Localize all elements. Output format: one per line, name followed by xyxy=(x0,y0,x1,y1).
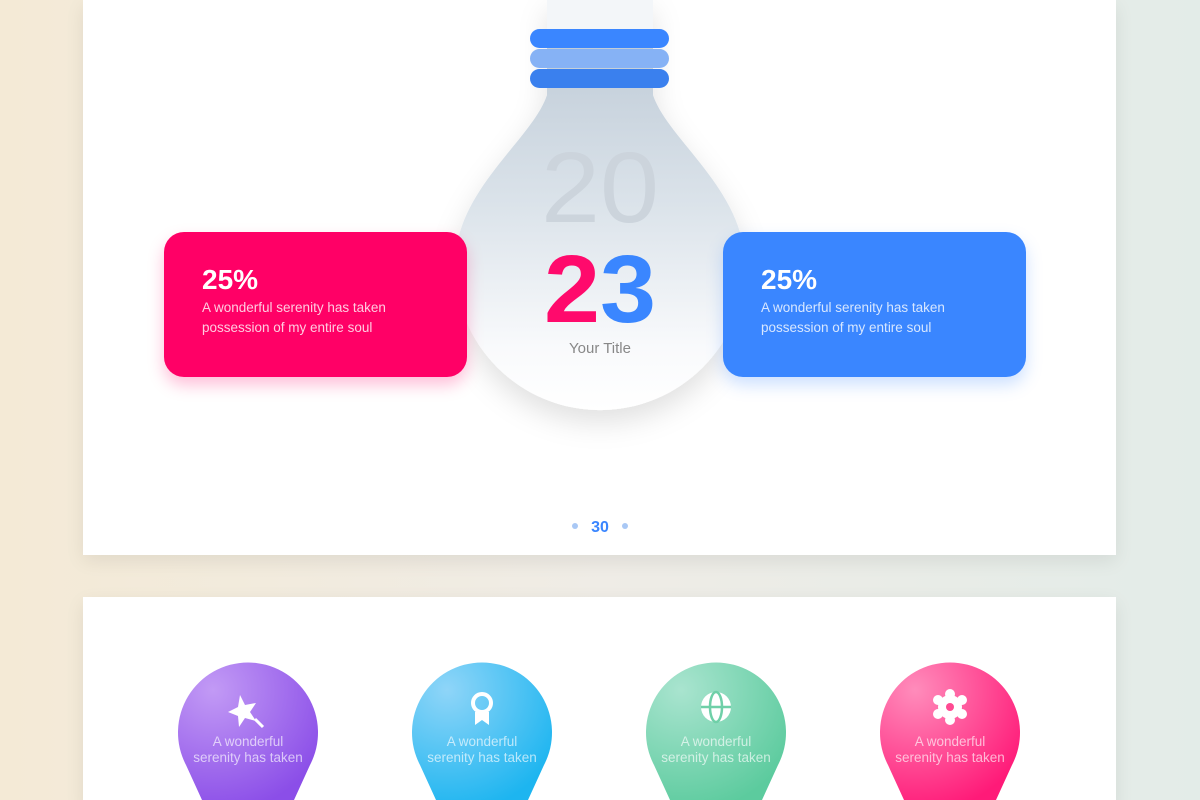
pin: pink gear: A wonderful xyxy=(915,734,985,749)
pin: purple star: serenity has taken xyxy=(193,750,303,765)
pin: blue award: A wonderful xyxy=(447,734,517,749)
card: left pink stat xyxy=(164,232,467,377)
pin: pink gear: serenity has taken xyxy=(895,750,1005,765)
pin: pink gear xyxy=(880,663,1020,800)
card: left pink stat: A wonderful serenity has taken xyxy=(202,300,386,315)
pin: green globe: A wonderful xyxy=(681,734,751,749)
bulb illustration xyxy=(456,0,744,536)
pin: green globe xyxy=(646,663,786,800)
card: left pink stat: possession of my entire soul xyxy=(202,320,372,335)
pin: blue award: serenity has taken xyxy=(427,750,537,765)
pin: green globe: serenity has taken xyxy=(661,750,771,765)
panel: bottom card xyxy=(83,597,1116,800)
pins row xyxy=(178,662,1020,800)
card: right blue stat: A wonderful serenity has taken xyxy=(761,300,945,315)
bulb bands xyxy=(530,29,669,88)
card: right blue stat: possession of my entire soul xyxy=(761,320,931,335)
page number: 30 xyxy=(591,519,609,536)
year text 23: 23 xyxy=(544,236,656,343)
pin: blue award xyxy=(412,663,552,800)
panel: top card xyxy=(83,0,1116,555)
card: left pink stat: 25% xyxy=(202,264,258,295)
year text 20: 20 xyxy=(541,132,659,244)
card: right blue stat: 25% xyxy=(761,264,817,295)
card: right blue stat xyxy=(723,232,1026,377)
page number xyxy=(572,519,628,536)
pin: purple star: A wonderful xyxy=(213,734,283,749)
your title: Your Title xyxy=(569,340,631,357)
pin: purple star xyxy=(178,663,318,800)
